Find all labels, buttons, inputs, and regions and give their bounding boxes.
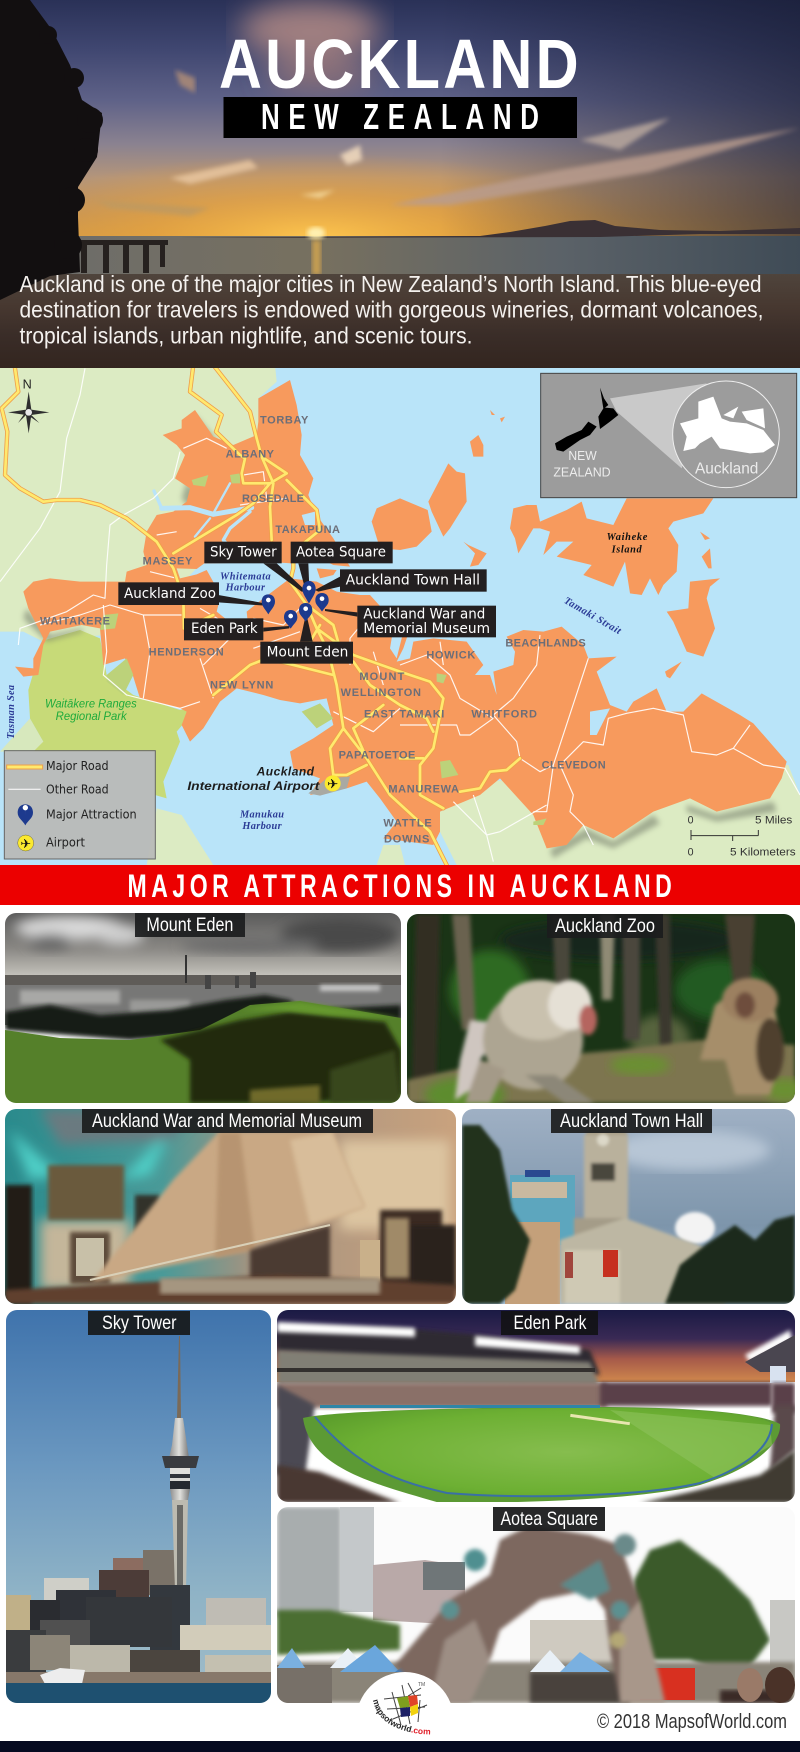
place names: HENDERSON <box>149 646 224 658</box>
place names: ALBANY <box>226 448 275 460</box>
place names: CLEVEDON <box>542 759 606 771</box>
roof and stands <box>277 1325 600 1375</box>
regional park <box>28 630 197 798</box>
place names: TAKAPUNA <box>275 524 340 536</box>
sky <box>0 0 800 323</box>
legend <box>4 751 155 859</box>
scale bar: 0 <box>688 815 694 827</box>
place names: DOWNS <box>384 833 429 845</box>
scale bar <box>688 815 796 859</box>
label: Sky Tower: Sky Tower <box>102 1312 177 1334</box>
callout boxes: Auckland War and <box>363 607 485 623</box>
hill <box>5 1001 401 1103</box>
city <box>6 1585 271 1680</box>
airport: ✈ <box>327 777 338 792</box>
place names: WHITFORD <box>471 709 537 721</box>
advertising strip <box>320 1405 600 1408</box>
locator inset: NEW <box>568 448 597 463</box>
place names: TORBAY <box>260 415 309 427</box>
place names: WAITAKERE <box>40 615 110 627</box>
carved gateway <box>395 1525 665 1703</box>
footer bar <box>0 1741 800 1752</box>
background buildings <box>44 1578 89 1608</box>
baboon small <box>700 978 784 1095</box>
locator inset: ZEALAND <box>553 465 611 480</box>
tents <box>277 1645 610 1672</box>
park name <box>45 696 137 723</box>
legend: Major Attraction <box>46 807 137 821</box>
pitch <box>303 1407 780 1503</box>
place names: MOUNT <box>359 671 405 683</box>
photo: Auckland War and Memorial Museum <box>5 1109 456 1304</box>
water <box>6 1683 271 1703</box>
callout boxes: Sky Tower <box>210 544 277 560</box>
water and island names: Harbour <box>225 583 266 594</box>
scale bar: 5 Kilometers <box>730 847 796 859</box>
tower <box>162 1336 199 1590</box>
place names: EAST TAMAKI <box>364 709 444 721</box>
compass <box>8 377 49 433</box>
callout boxes: Auckland Town Hall <box>346 572 480 588</box>
callout boxes: Memorial Museum <box>363 621 490 637</box>
upper harbour water <box>154 483 610 735</box>
legend: ✈ <box>20 836 31 851</box>
left and right crowd <box>277 1385 315 1475</box>
photo: Eden Park <box>277 1310 795 1502</box>
water and island names: Whitemata <box>220 571 271 582</box>
photo: Auckland Town Hall <box>462 1109 795 1304</box>
footer logo <box>360 1672 450 1734</box>
place names: ROSEDALE <box>242 493 304 505</box>
parks on urban area <box>100 473 547 825</box>
callout boxes: Eden Park <box>191 621 259 637</box>
land: north-west and south-east <box>0 365 800 865</box>
airport: Auckland <box>256 765 315 779</box>
tree silhouette <box>0 0 103 300</box>
water and island names <box>6 532 648 832</box>
intro text: tropical islands, urban nightlife, and scenic tours. <box>20 322 472 348</box>
major roads <box>2 365 520 865</box>
callout boxes <box>118 542 496 664</box>
place names: NEW LYNN <box>210 680 273 692</box>
photo: Mount Eden <box>5 913 401 1103</box>
water and island names: Island <box>611 545 642 556</box>
sun and reflection <box>307 227 325 275</box>
legend: Other Road <box>46 782 109 796</box>
water and island names: Manukau <box>239 810 284 821</box>
locator inset <box>541 373 797 498</box>
header panel <box>0 0 800 368</box>
photo: Sky Tower <box>6 1310 271 1703</box>
title: AUCKLAND <box>219 24 579 103</box>
land shadow <box>23 415 777 858</box>
water and island names: Tamaki Strait <box>562 595 624 637</box>
compass: N <box>23 377 32 391</box>
intro text <box>20 271 764 348</box>
map pins <box>262 581 329 629</box>
place names <box>40 415 606 845</box>
callout boxes: Aotea Square <box>296 544 386 560</box>
place names: WELLINGTON <box>341 687 421 699</box>
place names: BEACHLANDS <box>505 638 586 650</box>
park name: Regional Park <box>56 709 128 723</box>
legend: Airport <box>46 836 85 850</box>
subtitle bar: NEW ZEALAND <box>261 97 539 137</box>
crowd <box>277 1662 795 1703</box>
airport <box>187 765 350 796</box>
photo: Aotea Square <box>277 1507 795 1703</box>
place names: PAPATOETOE <box>339 749 415 761</box>
beach <box>0 274 800 368</box>
locator inset: Auckland <box>695 460 758 477</box>
place names: WATTLE <box>383 818 432 830</box>
crowd foreground <box>277 1465 400 1503</box>
baboon large <box>455 980 597 1103</box>
section banner: MAJOR ATTRACTIONS IN AUCKLAND <box>128 868 672 904</box>
photo: Auckland Zoo <box>407 914 795 1103</box>
water and island names: Waiheke <box>607 532 648 543</box>
section banner <box>0 865 800 905</box>
scale bar: 5 Miles <box>755 815 792 827</box>
other roads <box>0 368 800 862</box>
distant island <box>180 220 800 238</box>
water and island names: Harbour <box>241 821 283 832</box>
footer logo: TM <box>418 1682 425 1688</box>
callout boxes: Auckland Zoo <box>124 586 216 602</box>
sea <box>0 236 800 278</box>
place names: MASSEY <box>143 555 193 567</box>
place names: MANUREWA <box>388 784 459 796</box>
orange urban area <box>15 380 787 848</box>
airport: International Airport <box>187 779 320 793</box>
callout boxes: Mount Eden <box>267 644 348 660</box>
park name: Waitākere Ranges <box>45 696 137 710</box>
footer logo: mapsofworld.com <box>373 1700 430 1734</box>
map panel <box>0 368 800 865</box>
pier <box>74 240 168 273</box>
place names: HOWICK <box>426 650 475 662</box>
water and island names: Tasman Sea <box>6 685 17 739</box>
scale bar: 0 <box>688 847 694 859</box>
legend: Major Road <box>46 759 109 773</box>
islands <box>317 410 720 678</box>
trees <box>5 995 401 1040</box>
callout pointers <box>218 563 357 642</box>
